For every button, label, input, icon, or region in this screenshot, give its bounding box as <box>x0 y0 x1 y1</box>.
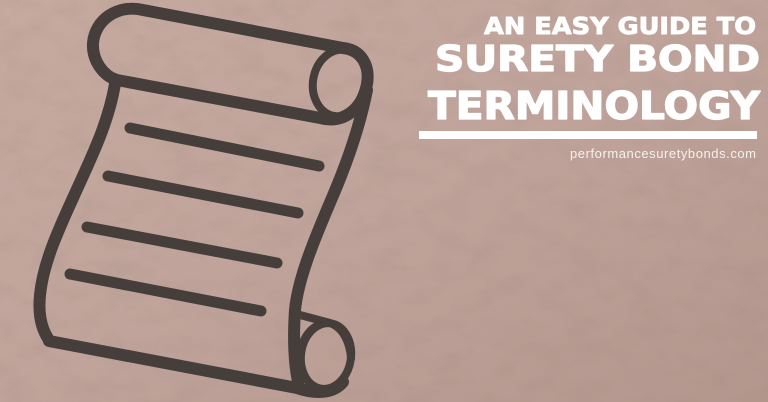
right edge of sheet <box>294 90 367 386</box>
icon: paper scroll <box>39 9 372 392</box>
bottom edge of sheet <box>49 341 343 392</box>
top roll end <box>308 45 372 121</box>
top roll body <box>93 9 368 119</box>
left edge of sheet <box>39 84 115 340</box>
bottom roll top edge <box>300 315 351 358</box>
text line 1 <box>130 128 319 166</box>
title line 1: AN EASY GUIDE TO <box>484 12 756 40</box>
text line 4 <box>70 274 261 311</box>
title block <box>428 12 761 128</box>
website url: performancesuretybonds.com <box>570 146 756 161</box>
text line 2 <box>108 176 298 213</box>
bottom roll end <box>297 320 355 392</box>
title line 2: SURETY BOND <box>435 39 760 80</box>
divider bar <box>419 131 757 139</box>
title line 3: TERMINOLOGY <box>428 84 761 128</box>
text line 3 <box>87 227 277 263</box>
